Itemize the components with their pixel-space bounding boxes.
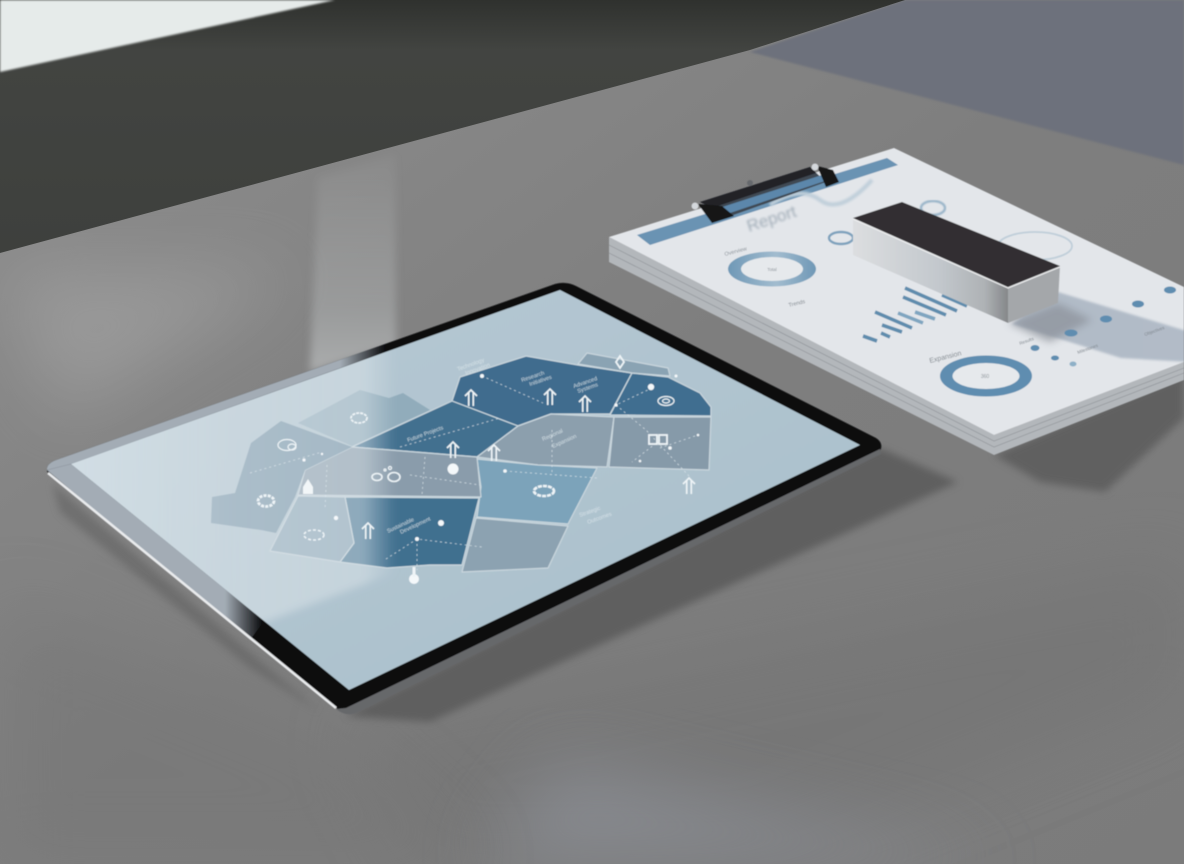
tablet top-left grey bezel [47,343,388,470]
timeline dots [1030,286,1176,366]
bottom donut chart: Expansion [929,350,962,365]
timeline labels [1019,325,1166,355]
thin ring chart [998,232,1072,260]
map labels: Technology [457,357,485,373]
bluish shadow band [1012,292,1184,362]
map labels: Strategic [579,506,602,519]
map labels: Regional [541,428,564,443]
tablet screen [71,290,860,690]
map labels: Future Projects [407,425,445,444]
timeline labels: Results [1019,336,1035,346]
region: top sliver [578,353,670,376]
map regions [211,353,711,572]
dots [302,374,699,584]
bottom donut chart [929,350,1032,396]
map icons [258,356,674,540]
clip [692,164,839,223]
clipboard document [609,148,1184,455]
region: grey middle [477,414,614,467]
paper stack side [609,237,1184,455]
reflection streak on desk [310,155,396,372]
region: bottom-left grey [270,496,354,562]
region: mid blue [477,459,597,524]
donut chart left: Overview [724,246,748,258]
map labels: Advanced [573,376,598,390]
arrows [303,389,695,539]
connector lines [250,376,698,570]
soft shadow on desk bottom [350,560,1184,864]
region: centre grey [298,447,481,497]
map labels [386,357,613,536]
region: top dark [452,356,632,426]
region: bottom dark [340,497,479,568]
bottom donut chart: 360 [981,374,989,380]
region: grey right [609,417,711,470]
clipboard shadow [994,372,1184,492]
map labels: Expansion [551,434,578,450]
tablet body and bezel [47,283,881,713]
tablet shadow [345,448,958,722]
top ring chart [921,201,945,215]
region: bottom grey [462,518,568,572]
faint report title: Report [744,202,799,236]
region: left grey [211,421,352,533]
faint chart ghost [770,180,872,205]
tablet left shadow [52,483,320,712]
map labels: Development [399,516,432,536]
donut chart left: Total [767,267,777,272]
map labels: Research [521,370,545,384]
pin stem [412,567,416,577]
glare over screen left [71,349,393,624]
timeline labels: Objectives [1144,325,1166,337]
tablet lower-left grey bezel [47,464,264,640]
donut chart left [724,246,816,286]
tablet lower rim [336,449,881,714]
block shadow [1008,303,1092,342]
map labels: Systems [577,382,599,395]
map labels: Outcomes [587,511,613,526]
small ring chart [829,232,853,244]
metal block [853,202,1060,323]
bar chart label: Trends [788,299,806,309]
paper top [609,148,1184,435]
region: upper-left grey [298,390,430,446]
region: middle dark [352,401,518,457]
map labels: Sustainable [386,517,415,535]
timeline labels: Milestones [1077,343,1099,355]
bar chart [863,287,978,341]
map labels: Initiatives [529,375,553,388]
tablet [30,283,881,714]
region: right dark [610,373,711,416]
tablet white rim [48,473,336,708]
blue header stripe [637,158,898,245]
map labels: Innovation [465,362,491,377]
